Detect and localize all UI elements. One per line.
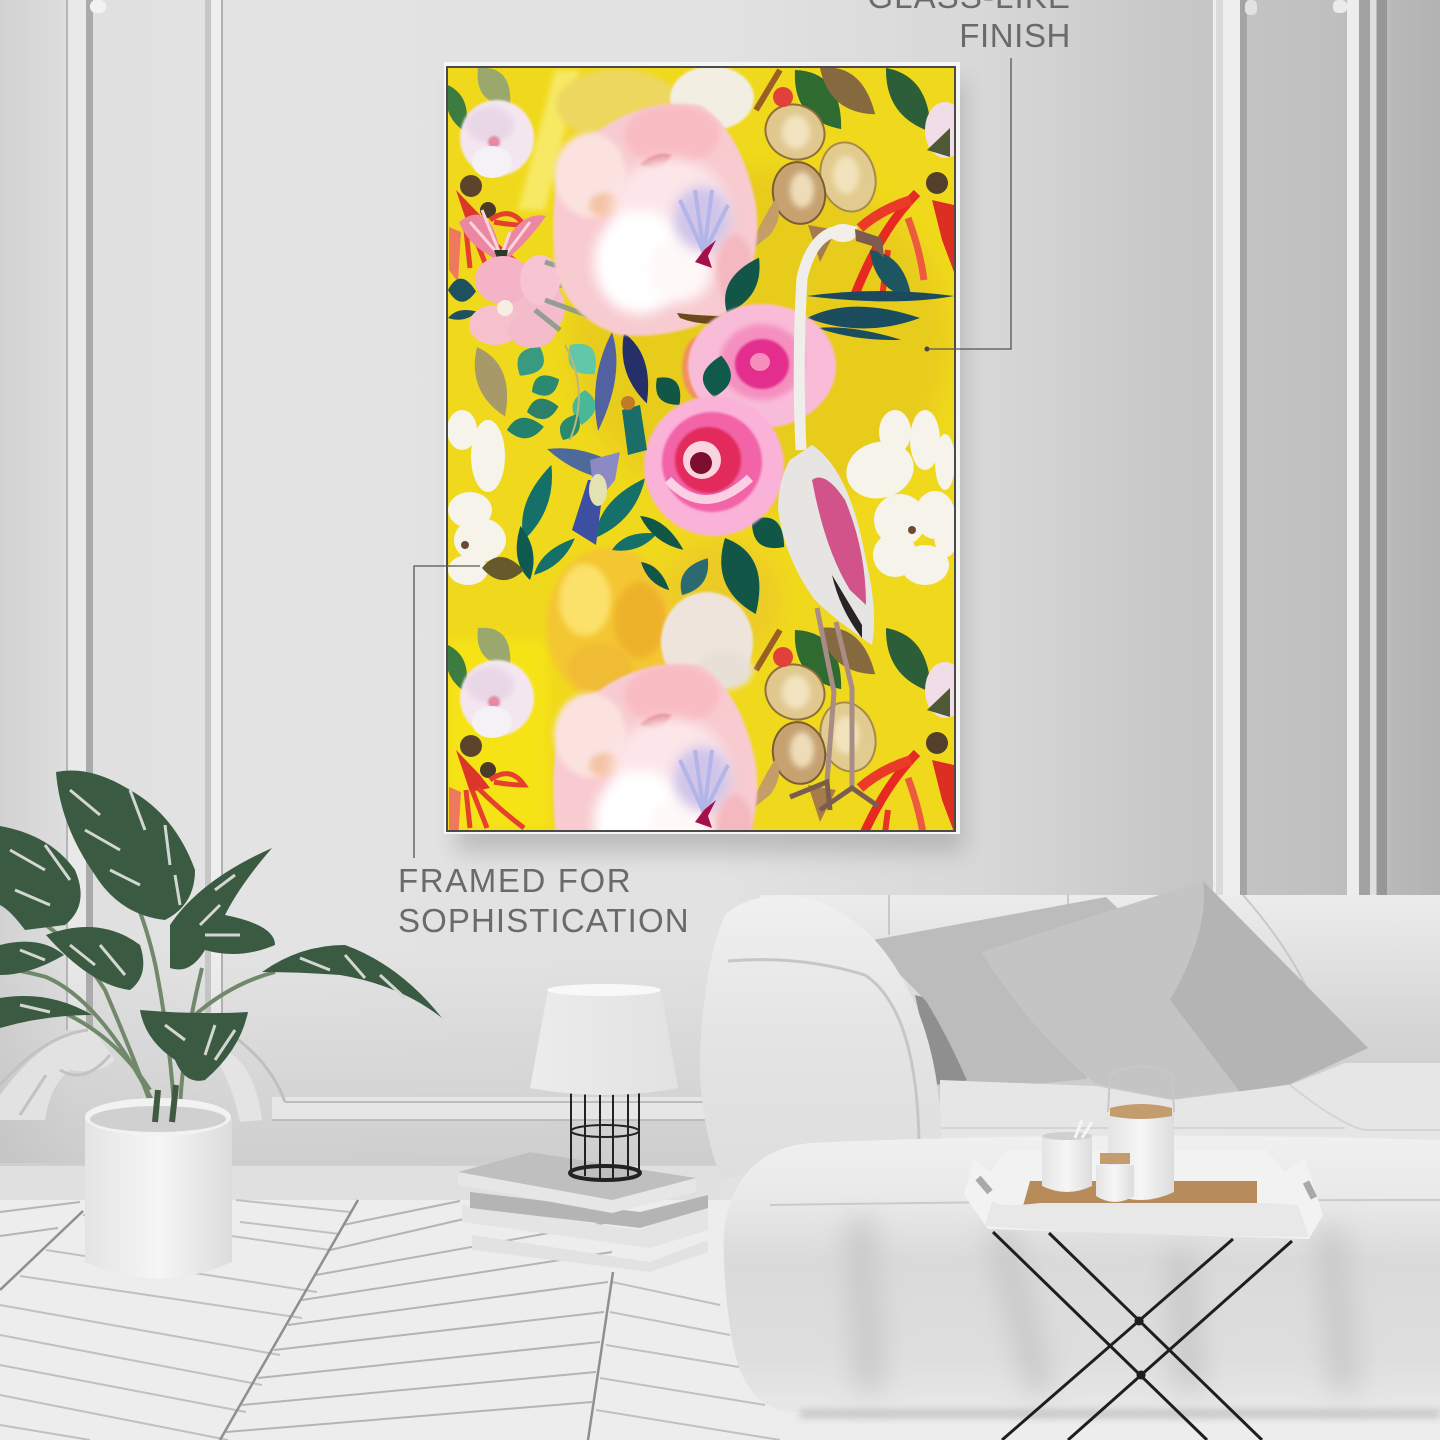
sofa <box>700 881 1440 1414</box>
hummingbird <box>547 396 647 545</box>
tray back and sides <box>964 1150 1323 1239</box>
repeat pattern tile <box>440 56 965 860</box>
stack of books <box>458 1152 708 1272</box>
sofa back <box>760 895 1440 1100</box>
wood board <box>1023 1181 1257 1206</box>
tray handles <box>978 1178 1314 1198</box>
pivots <box>1139 1321 1141 1375</box>
plant stems <box>0 894 275 1118</box>
white pot <box>85 1085 232 1278</box>
glare streak <box>518 70 580 210</box>
lamp shade <box>530 984 678 1095</box>
fern sprig <box>534 260 589 332</box>
dark gap <box>915 995 970 1085</box>
white frame <box>444 62 960 834</box>
ceramic cup <box>1042 1120 1092 1192</box>
roses <box>644 304 836 536</box>
table legs <box>993 1232 1292 1440</box>
table lamp on books <box>458 984 708 1272</box>
potted plant <box>0 770 442 1278</box>
monstera slits <box>10 790 405 1060</box>
pink carnation and hibiscus <box>459 210 565 348</box>
teal leaves <box>512 242 954 620</box>
callout line: framed for sophistication <box>414 566 480 858</box>
sofa left arm <box>700 895 942 1180</box>
callout text: glass-like finish: FINISH <box>959 17 1071 54</box>
callout line: glass-like finish <box>927 58 1011 349</box>
seat cushions <box>940 1063 1440 1180</box>
frame shadow <box>456 82 964 852</box>
ceramic jar <box>1108 1066 1174 1200</box>
monstera leaves <box>0 770 442 1081</box>
top white flowers <box>661 66 754 692</box>
tray front <box>985 1201 1309 1237</box>
flamingo <box>778 224 884 810</box>
side table <box>964 1066 1323 1440</box>
framed artwork <box>440 56 965 896</box>
floral artwork <box>448 68 954 830</box>
left bamboo and small leaves <box>447 278 657 444</box>
white lilies <box>447 410 958 585</box>
lamp cage <box>570 1093 640 1180</box>
floor planks <box>0 1201 612 1432</box>
yellow pompom flowers <box>546 69 680 703</box>
small canister <box>1096 1153 1134 1202</box>
sofa folds <box>860 1220 1345 1390</box>
leader dot <box>924 346 930 352</box>
callout text: framed for sophistication: FRAMED FOR <box>398 862 632 899</box>
floor <box>0 1200 1440 1440</box>
peony flowers <box>553 104 757 896</box>
sofa front <box>724 1136 1440 1412</box>
grey pillows <box>867 881 1368 1099</box>
callout text: framed for sophistication: SOPHISTICATION <box>398 902 690 939</box>
